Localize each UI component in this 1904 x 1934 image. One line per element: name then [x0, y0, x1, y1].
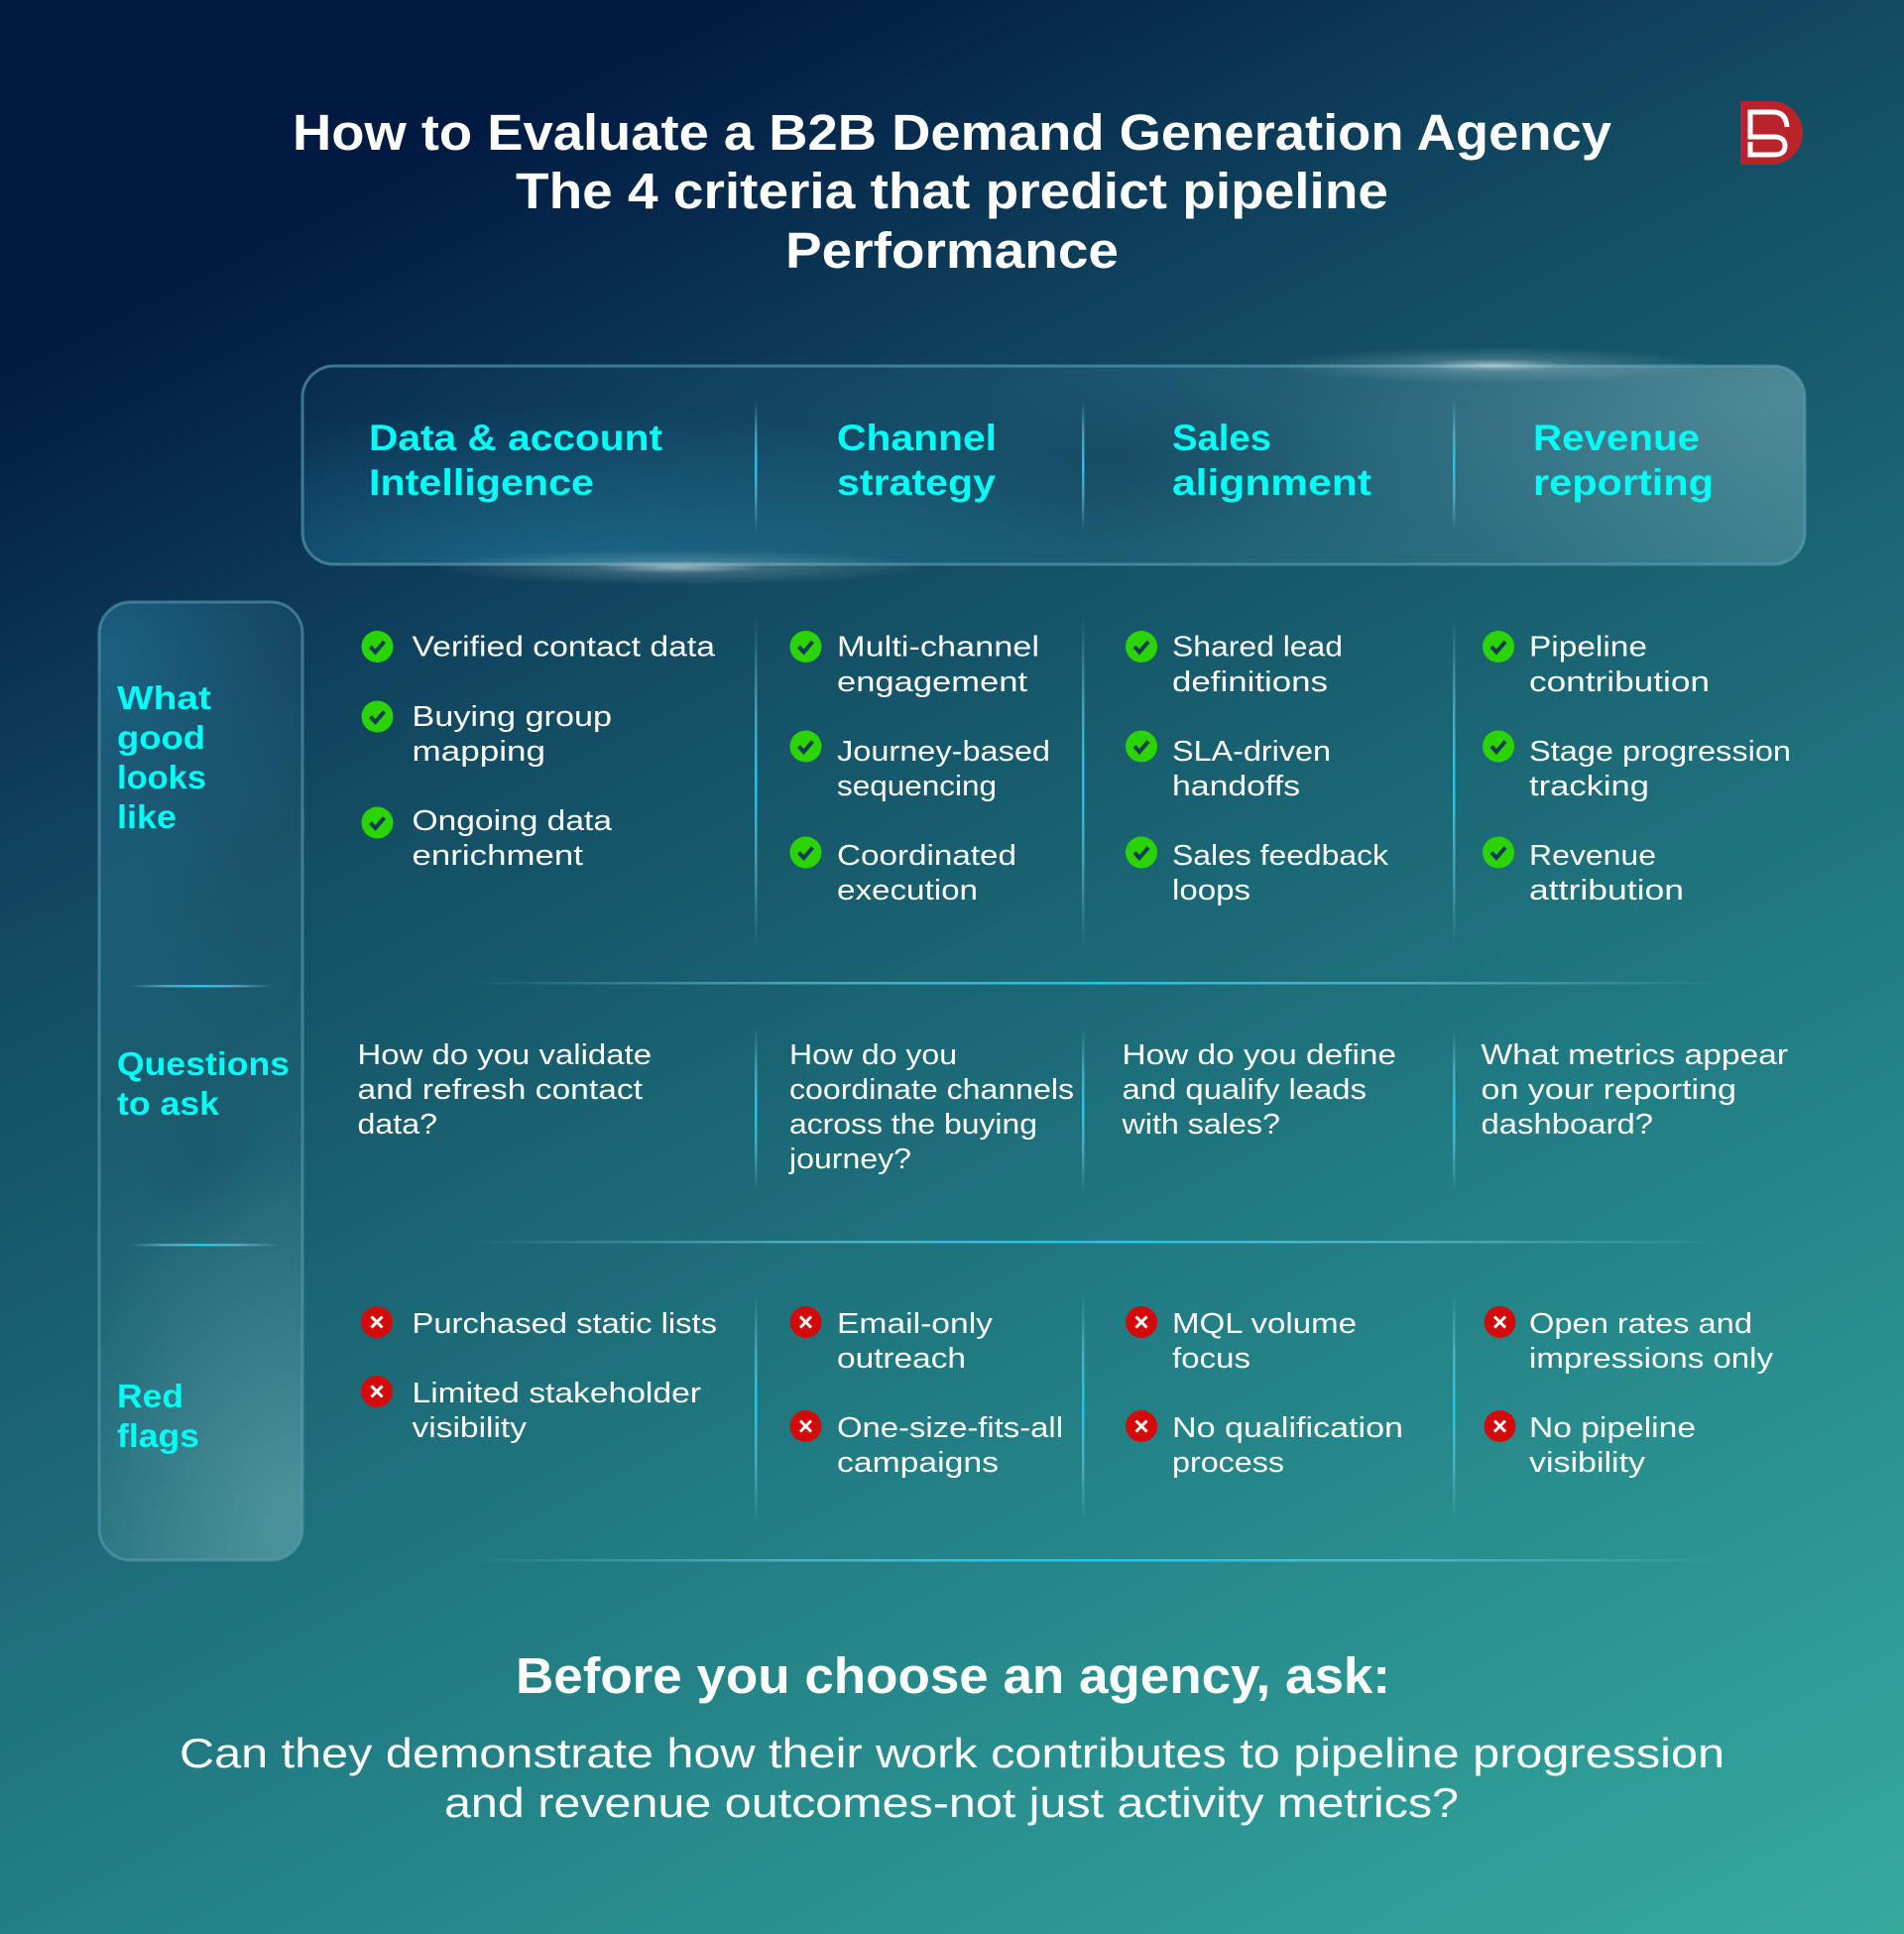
heading: sales alignment	[1172, 418, 1371, 503]
list: channel strategy: execution	[837, 875, 978, 907]
list: channel strategy: Coordinated	[837, 840, 1016, 872]
list: revenue reporting: Revenue	[1529, 840, 1656, 872]
list: data and account intelligence: Verified contact data	[413, 631, 716, 663]
question: channel: journey?	[788, 1144, 911, 1175]
heading: revenue reporting: reporting	[1533, 462, 1714, 503]
closing question	[179, 1730, 1725, 1826]
heading: data and account intelligence: Data & account	[369, 418, 662, 458]
flags: sales: process	[1172, 1447, 1284, 1479]
question: channel: coordinate channels	[789, 1074, 1074, 1106]
question: sales: with sales?	[1121, 1109, 1280, 1141]
flags: sales	[1126, 1306, 1403, 1479]
question: data	[357, 1039, 652, 1141]
list: sales alignment	[1126, 631, 1389, 907]
label: what good looks like: What	[117, 679, 211, 716]
flags: revenue: No pipeline	[1529, 1412, 1696, 1444]
question: revenue: on your reporting	[1482, 1074, 1736, 1106]
question: channel	[788, 1039, 1074, 1175]
list: sales alignment: Sales feedback	[1172, 840, 1389, 872]
flags: revenue	[1484, 1306, 1774, 1479]
question: sales	[1121, 1039, 1396, 1141]
label: questions to ask: to ask	[117, 1085, 220, 1122]
question: data: data?	[357, 1109, 437, 1141]
question: data: and refresh contact	[357, 1074, 643, 1106]
title: The 4 criteria that predict pipeline	[516, 163, 1388, 219]
panel: row labels	[97, 601, 303, 1561]
question: channel: How do you	[789, 1039, 957, 1071]
flags: channel: campaigns	[837, 1447, 999, 1479]
flags: sales: MQL volume	[1172, 1308, 1357, 1340]
flags: data	[361, 1306, 717, 1444]
heading: sales alignment: alignment	[1172, 462, 1371, 503]
question: sales: How do you define	[1123, 1039, 1396, 1071]
question: revenue: What metrics appear	[1482, 1039, 1788, 1071]
title: Performance	[785, 222, 1119, 279]
flags: channel: Email-only	[837, 1308, 994, 1340]
flags: channel: One-size-fits-all	[837, 1412, 1063, 1444]
list: revenue reporting: Pipeline	[1529, 631, 1647, 663]
label: questions to ask: Questions	[117, 1045, 290, 1082]
panel: column headers	[301, 349, 1807, 583]
list: sales alignment: loops	[1172, 875, 1250, 907]
question: sales: and qualify leads	[1123, 1074, 1367, 1106]
label: questions to ask	[117, 1045, 290, 1122]
column dividers	[755, 617, 1456, 1521]
label: red flags: flags	[117, 1417, 199, 1454]
row: questions to ask	[357, 1039, 1788, 1175]
list: sales alignment: SLA-driven	[1172, 736, 1331, 768]
list: data and account intelligence: mapping	[413, 736, 545, 768]
list: sales alignment: handoffs	[1172, 771, 1300, 802]
title	[293, 104, 1612, 279]
flags: data: Purchased static lists	[413, 1308, 717, 1340]
closing question: and revenue outcomes-not just activity metrics?	[444, 1779, 1459, 1826]
closing question: Can they demonstrate how their work contributes to pipeline progression	[179, 1730, 1725, 1776]
flags: data: Limited stakeholder	[413, 1378, 701, 1409]
list: revenue reporting	[1483, 631, 1791, 907]
flags: data: visibility	[413, 1412, 528, 1444]
list: channel strategy: Journey-based	[837, 736, 1050, 768]
label: what good looks like: looks	[117, 759, 206, 795]
list: data and account intelligence: Ongoing data	[413, 805, 613, 837]
list: revenue reporting: contribution	[1529, 666, 1710, 698]
closing heading: Before you choose an agency, ask:	[516, 1647, 1390, 1704]
label: red flags: Red	[117, 1378, 183, 1414]
question: revenue	[1482, 1039, 1788, 1141]
flags: revenue: visibility	[1529, 1447, 1646, 1479]
list: channel strategy	[789, 631, 1050, 907]
question: data: How do you validate	[357, 1039, 652, 1071]
flags: sales: No qualification	[1172, 1412, 1403, 1444]
label: red flags	[117, 1378, 199, 1454]
heading: channel strategy: Channel	[837, 418, 997, 458]
heading: channel strategy	[837, 418, 997, 503]
heading: revenue reporting	[1533, 418, 1714, 503]
question: channel: across the buying	[789, 1109, 1037, 1141]
list: revenue reporting: attribution	[1529, 875, 1684, 907]
row: red flags	[361, 1306, 1774, 1479]
list: channel strategy: engagement	[837, 666, 1027, 698]
list: revenue reporting: Stage progression	[1529, 736, 1791, 768]
flags: revenue: Open rates and	[1529, 1308, 1752, 1340]
heading: sales alignment: Sales	[1172, 418, 1271, 458]
list: revenue reporting: tracking	[1529, 771, 1649, 802]
question: revenue: dashboard?	[1482, 1109, 1653, 1141]
list: sales alignment: definitions	[1172, 666, 1328, 698]
list: channel strategy: Multi-channel	[837, 631, 1039, 663]
list: data and account intelligence	[361, 631, 716, 872]
title: How to Evaluate a B2B Demand Generation Agency	[293, 104, 1612, 161]
label: what good looks like: good	[117, 719, 205, 756]
list: data and account intelligence: enrichment	[413, 840, 583, 872]
flags: sales: focus	[1172, 1343, 1250, 1375]
flags: channel	[789, 1306, 1063, 1479]
heading: revenue reporting: Revenue	[1533, 418, 1700, 458]
list: data and account intelligence: Buying group	[413, 701, 612, 733]
row: what good looks like	[361, 631, 1791, 907]
flags: revenue: impressions only	[1529, 1343, 1774, 1375]
flags: channel: outreach	[837, 1343, 966, 1375]
label: what good looks like	[117, 679, 211, 835]
label: what good looks like: like	[117, 798, 177, 835]
heading: data and account intelligence	[369, 418, 662, 503]
list: channel strategy: sequencing	[837, 771, 997, 802]
heading: data and account intelligence: Intelligence	[369, 462, 594, 503]
row dividers	[468, 982, 1727, 1561]
icon: brand logo	[1740, 101, 1803, 165]
list: sales alignment: Shared lead	[1172, 631, 1343, 663]
heading: channel strategy: strategy	[837, 462, 996, 503]
